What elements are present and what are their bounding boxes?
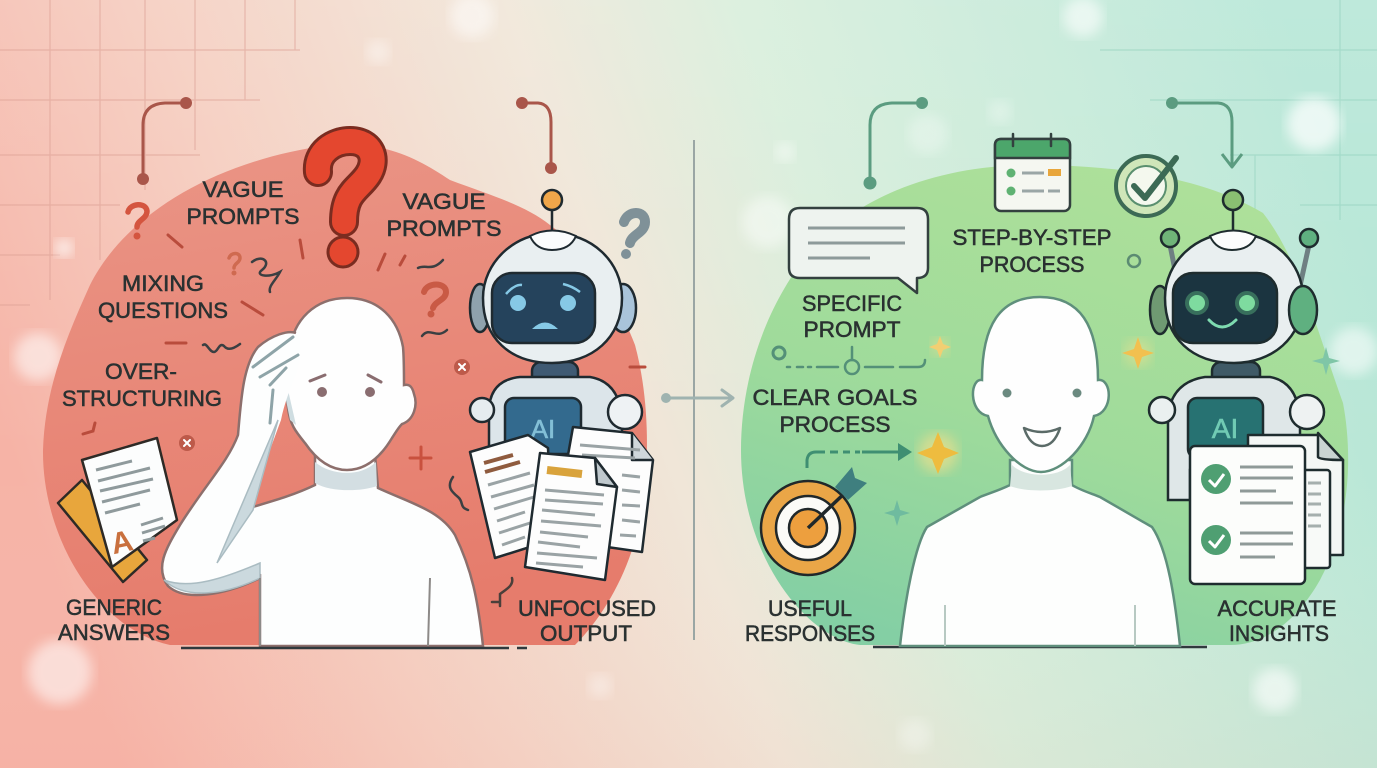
text: accurate insights: INSIGHTS — [1229, 621, 1329, 646]
icon: answer sheets with letter A: A — [108, 524, 136, 561]
connector: dashed arrow to sparkle — [807, 443, 912, 468]
text: vague prompts 2 — [386, 189, 502, 241]
text: useful responses — [745, 596, 875, 646]
fingers — [253, 337, 298, 423]
icon: accurate papers with checks — [1190, 433, 1343, 584]
text: step-by-step process — [952, 225, 1112, 277]
text: vague prompts 1: PROMPTS — [186, 204, 300, 229]
icon: calendar — [995, 134, 1070, 211]
connector: left top — [137, 97, 192, 185]
text: unfocused output: UNFOCUSED — [518, 596, 656, 621]
face: happy — [1002, 388, 1082, 446]
divider with arrow — [661, 140, 733, 640]
icon: check badge — [1116, 156, 1176, 216]
robot: confused — [470, 190, 642, 470]
text: generic answers: ANSWERS — [58, 620, 170, 645]
text: accurate insights — [1218, 596, 1336, 646]
body — [225, 455, 483, 646]
connector: dotted line under specific prompt — [773, 347, 925, 374]
text: useful responses: RESPONSES — [745, 621, 875, 646]
icon: grey question mark — [622, 213, 645, 258]
icon: speech bubble — [789, 208, 928, 293]
text: over-structuring: STRUCTURING — [62, 386, 222, 411]
text: specific prompt: PROMPT — [804, 317, 900, 342]
baseline right — [873, 646, 1207, 648]
text: clear goals process — [752, 385, 918, 437]
text: step-by-step process: PROCESS — [980, 252, 1084, 277]
robot: happy — [1149, 190, 1324, 500]
text: useful responses: USEFUL — [768, 596, 852, 621]
baseline left — [181, 647, 527, 649]
text: specific prompt: SPECIFIC — [802, 291, 902, 316]
text: unfocused output — [518, 596, 656, 646]
panel: specific prompts blob — [741, 165, 1348, 645]
text: vague prompts 1: VAGUE — [202, 177, 284, 202]
text: clear goals process: PROCESS — [780, 412, 890, 437]
icon: target with arrow — [761, 467, 867, 575]
robot: happy: AI — [1212, 413, 1238, 444]
text: over-structuring — [62, 359, 222, 411]
arm raised — [162, 332, 301, 595]
face: worried — [310, 375, 381, 396]
text: mixing questions — [98, 271, 228, 323]
text: generic answers: GENERIC — [66, 595, 162, 620]
text: unfocused output: OUTPUT — [540, 621, 632, 646]
text: specific prompt — [802, 291, 902, 342]
text: mixing questions: MIXING — [122, 271, 204, 296]
arm shadow — [164, 420, 278, 593]
person: smiling — [900, 297, 1180, 646]
doodles: confusion marks — [83, 205, 645, 606]
text: vague prompts 2: PROMPTS — [386, 216, 502, 241]
icon: answer sheets with letter A — [58, 438, 177, 582]
panel: vague prompts blob — [43, 144, 647, 645]
text: vague prompts 1 — [186, 177, 300, 229]
icon: big question mark — [318, 141, 373, 267]
head — [287, 298, 416, 470]
text: generic answers — [58, 595, 170, 645]
icon: sparkles — [884, 336, 1340, 526]
person: confused — [162, 298, 483, 646]
text: step-by-step process: STEP-BY-STEP — [952, 225, 1112, 250]
text: clear goals process: CLEAR GOALS — [752, 385, 918, 410]
hand shadow on head — [282, 345, 296, 425]
connector: right panel top — [864, 97, 928, 190]
neck shadow — [315, 462, 377, 490]
text: vague prompts 2: VAGUE — [402, 189, 486, 214]
robot: confused: AI — [531, 414, 555, 444]
connector: right top left side — [516, 97, 557, 174]
text: mixing questions: QUESTIONS — [98, 298, 228, 323]
icon: unfocused output papers — [470, 427, 653, 580]
connector: arrow into robot — [1166, 97, 1242, 167]
text: accurate insights: ACCURATE — [1218, 596, 1336, 621]
text: over-structuring: OVER- — [105, 359, 177, 384]
